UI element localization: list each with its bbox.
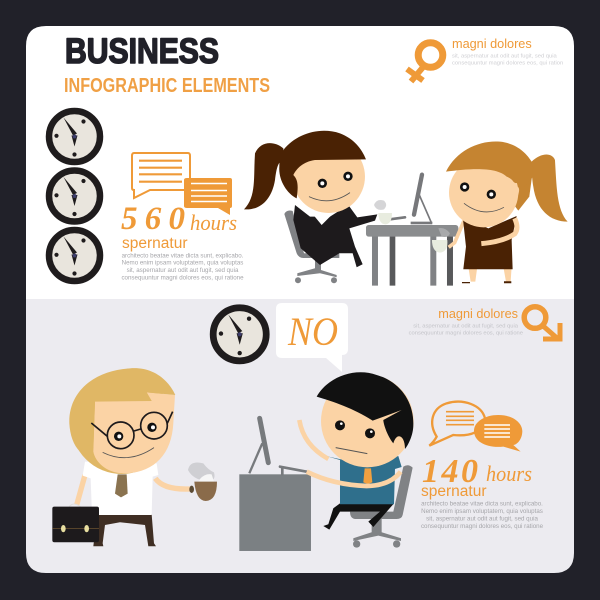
panel: top white card [26, 26, 574, 299]
heading: spernatur bottom: spernatur [421, 483, 486, 500]
raised arm [299, 420, 328, 459]
chair [350, 465, 413, 548]
text block: top right caption: sit, aspernatur aut odit aut fugit, sed quia [452, 54, 558, 60]
icon: oval speech bubbles [429, 402, 522, 452]
panel: bottom lavender card [26, 299, 574, 573]
heading: magni dolores bottom: magni dolores [438, 307, 518, 321]
shirt [327, 456, 402, 504]
stat: 140 hours [422, 453, 532, 490]
icon: three clocks [49, 111, 100, 281]
icon: square speech bubbles [132, 153, 232, 215]
text block: bottom paragraph [421, 500, 544, 530]
icon: male symbol [524, 307, 560, 339]
chair [284, 211, 339, 283]
title: BUSINESS [65, 32, 219, 71]
coffee cup [188, 462, 217, 501]
icon: wall clock [213, 308, 266, 361]
arms [77, 475, 85, 505]
stat: 140 hours: hours [486, 461, 532, 486]
text block: bottom paragraph: architecto beatae vitae dicta sunt, explicabo. [421, 500, 543, 508]
text block: top paragraph: architecto beatae vitae dicta sunt, explicabo. [122, 252, 244, 260]
woman one [244, 131, 377, 267]
heading: magni dolores top: magni dolores [452, 37, 532, 51]
text block: bottom paragraph: sit, aspernatur aut odit aut fugit, sed quia [426, 516, 538, 522]
speech bubble: NO: NO [287, 309, 338, 354]
stat: 140 hours: 140 [422, 453, 478, 490]
text block: bottom right caption: sit, aspernatur aut odit aut fugit, sed quia [413, 324, 519, 330]
text block: top paragraph: consequuntur magni dolores eos, qui ratione [121, 274, 244, 282]
shirt [83, 462, 158, 515]
head [317, 372, 414, 467]
heading: spernatur: spernatur [122, 235, 187, 252]
text block: bottom paragraph: Nemo enim ipsam voluptatem, quia voluptas [421, 508, 543, 515]
desk and monitor [366, 175, 458, 286]
woman two [446, 141, 568, 283]
stat: 560 hours [121, 201, 237, 237]
tie [115, 474, 128, 497]
office scene: two women at desk [244, 131, 568, 286]
head [69, 368, 175, 474]
stat: 560 hours: 560 [121, 201, 185, 237]
text block: bottom right caption [409, 324, 523, 336]
text block: top paragraph: sit, aspernatur aut odit aut fugit, sed quia [127, 267, 239, 274]
man with glasses scene [52, 368, 311, 551]
text block: top paragraph [121, 252, 244, 282]
text block: top right caption: consequuntur magni dolores eos, qui ration [452, 60, 563, 66]
text block: top paragraph: Nemo enim ipsam voluptatem, quia voluptas [122, 260, 243, 266]
tie [363, 468, 372, 484]
stressed man scene [299, 372, 414, 548]
stat: 560 hours: hours [190, 210, 237, 235]
briefcase [52, 504, 99, 542]
text block: bottom right caption: consequuntur magni dolores eos, qui ratione [409, 330, 523, 336]
trousers [93, 514, 156, 546]
subtitle: INFOGRAPHIC ELEMENTS [64, 74, 270, 97]
text block: bottom paragraph: consequuntur magni dolores eos, qui ratione [421, 523, 544, 530]
trousers [323, 503, 394, 530]
speech bubble: NO [276, 303, 348, 372]
icon: female symbol [407, 43, 443, 82]
front arm [307, 472, 401, 486]
coffee cup [374, 200, 450, 253]
text block: top right caption [452, 54, 563, 66]
desk and monitor [239, 418, 311, 551]
